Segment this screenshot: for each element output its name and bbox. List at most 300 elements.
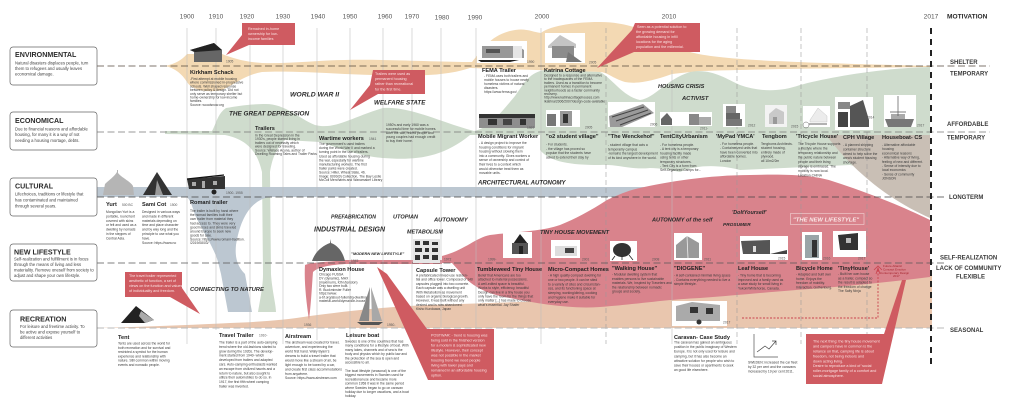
year axis: 1920	[240, 14, 255, 20]
image: houseboat	[884, 95, 916, 127]
entry: Travel Trailer	[219, 333, 277, 388]
entry: Leisure boat: recreational use and became more	[345, 377, 397, 381]
entry: Leisure boat: 1950-	[387, 323, 395, 327]
image: Diogene	[674, 233, 702, 260]
right axis motivation labels: TEMPORARY	[950, 72, 988, 78]
entry: Walking House: materials. We, Inspired by Travelers and	[612, 281, 672, 285]
panel: new lifestyle	[10, 244, 97, 281]
entry: Travel Trailer: utilize their automobiles to do so. In	[219, 376, 272, 380]
entry: Mobile Migrant Worker: - A design project to improve the	[479, 141, 527, 145]
panel: recreation	[10, 310, 97, 347]
entry: Mobile Migrant Worker: their lives to a context which	[479, 162, 521, 166]
entry: FEMA trailer	[477, 41, 535, 94]
panel: cultural: through several years.	[15, 204, 56, 208]
entry: Tent: Tent	[118, 335, 130, 341]
era labels: WORLD WAR II	[290, 92, 339, 98]
entry: Romani trailer: goods for sale.	[190, 234, 212, 238]
era labels: AUTONOMY of the self	[651, 218, 714, 224]
panel: cultural: has contaminated and maintained	[15, 198, 79, 202]
entry: Tengbom: entirely made of	[761, 150, 785, 154]
entry: Tengbom: plywood.	[761, 155, 774, 159]
era labels: HOUSING CRISIS	[658, 84, 705, 90]
entry: Leaf House	[738, 236, 788, 290]
entry: TentCityUrbanism: - Tent City is a form from	[660, 164, 697, 168]
entry: MyPad YMCA: - Containerized units that	[720, 146, 757, 150]
entry: Trailers: Trailers	[255, 126, 275, 132]
text: 1950s mobile homes: to buy their home.	[386, 139, 413, 143]
entry: Houseboat - CS: housing	[882, 147, 894, 151]
entry: Walking House: groups and society.	[612, 290, 641, 294]
entry: CPH Village: - A planned shipping	[843, 143, 873, 147]
band: self-realization (red)	[442, 175, 930, 307]
entry: Sami Cot: Sami Cot	[142, 202, 166, 208]
entry: Micro-Compact Homes: sleeping, working/dining, cooking	[548, 291, 597, 295]
entry: The Wenckehof: - student village that acts a	[608, 143, 648, 147]
era labels: TINY HOUSE MOVEMENT	[540, 230, 610, 236]
entry: Yurt: covered with skins	[106, 219, 134, 223]
entry: Houseboat - CS: economical reasons	[882, 151, 912, 155]
year axis	[180, 14, 939, 22]
panel: environmental	[10, 47, 97, 85]
image: bicycle home	[802, 232, 822, 260]
entry: Capsule Tower: However, it was built without any	[416, 299, 465, 303]
image: walking house	[610, 241, 637, 261]
right axis motivation labels: SELF-REALIZATION	[940, 256, 997, 262]
entry: Bicycle Home	[796, 232, 833, 289]
image: Wenckehof	[608, 102, 655, 127]
entry: Leisure boat: many lakes, channels and of sea is the	[345, 348, 403, 352]
era labels	[190, 84, 767, 293]
entry: Tent: Tents are used across the world for	[118, 342, 171, 346]
right axis motivation labels: LONGTERM	[949, 195, 983, 201]
entry: Sami Cot: Source: https://www.no	[142, 241, 176, 245]
entry: Tricycle House: mobility is now local.	[798, 169, 829, 173]
entry: CPH Village	[835, 97, 878, 165]
entry: Mobile Migrant Worker: housing conditions for migrant	[479, 145, 524, 149]
year axis: 2010	[662, 14, 677, 20]
entry: Leisure boat: many conditions for a lifestyle of boat. With	[345, 344, 409, 348]
entry: Sami Cot: and by way long and the	[142, 228, 178, 232]
entry: Micro-Compact Homes: to a variety of sites and circumstan-	[548, 282, 601, 286]
entry: Leisure boat: the protection of the sea is open and	[345, 356, 399, 360]
entry: Capsule Tower: With Metabolism as movement	[416, 290, 462, 294]
entry: Wartime workers: trailer parks were created.	[319, 167, 358, 171]
callout: tiny house movement and caravans: down acting living.	[813, 360, 843, 364]
entry: Caravan case study	[672, 301, 737, 372]
entry: Katrina Cottage	[544, 33, 605, 103]
entry: The Wenckehof: "The Wenckehof"	[608, 134, 655, 140]
callout: postwar: housing trend we need people	[431, 358, 480, 362]
entry: Wartime workers: 1941	[369, 137, 377, 141]
entry: Travel Trailer: Travel Trailer	[219, 333, 254, 339]
era labels: THE GREAT DEPRESSION	[229, 110, 310, 118]
entry: Capsule Tower: Kisho Kurokawa, Japan	[416, 307, 451, 311]
entry: Yurt: Mongolian Yurt is a	[106, 210, 135, 214]
right axis motivation labels	[936, 60, 1001, 334]
entry: TentCityUrbanism: using tents or other	[660, 156, 690, 160]
entry: Kirkham Schack: between policy & design. Did not	[190, 88, 239, 92]
entry: o2 student village: - For students.	[546, 142, 568, 146]
line chart: Sweden car fleet and caravans: increased by 19 per cent 2011.	[748, 370, 794, 374]
entry: Kirkham Schack: -First attempt at mobile housing	[190, 77, 237, 81]
band: modern new lifestyle arc (red)	[305, 260, 442, 320]
entry: FEMA trailer: mobile houses to house newly	[484, 78, 529, 82]
entry: MyPad YMCA: have been converted into	[720, 150, 758, 154]
entry: The Wenckehof: of its kind anywhere in the world.	[608, 156, 657, 160]
era labels: PREFABRICATION	[331, 214, 376, 220]
entry: TentCityUrbanism: - A tent city is a temporary	[660, 147, 699, 151]
entry: concept emotion: Contemporary Design	[880, 271, 910, 275]
entry: MyPad YMCA: - For homeless people.	[720, 142, 754, 146]
year axis: 2017	[924, 14, 939, 20]
entry: Romani trailer: The trailer is built by hand where	[190, 209, 238, 213]
era labels: PROSUMER	[723, 222, 751, 228]
entry: Leisure boat: where Swedes began to go on caravan	[345, 386, 403, 390]
callout: tiny house movement and caravans	[806, 280, 906, 384]
entry: The Wenckehof: -remains the largest development	[608, 152, 658, 156]
callout: travel trailer aesthetic: views on the function and values	[129, 284, 182, 288]
entry: Houseboat - CS: 2017	[917, 124, 925, 128]
entry: Tumbleweed Tiny House: A well-edited space is beautiful.	[478, 282, 525, 286]
entry: Dymaxion House: Only two were built.	[319, 284, 348, 288]
entry: Trailers: were designed for traveling.	[255, 145, 296, 149]
line chart: Sweden car fleet and caravans: by 32 per cent and the caravans	[748, 365, 796, 369]
image: o2 village	[546, 110, 580, 127]
entry: CPH Village: container structure	[843, 147, 871, 151]
callout: aging population	[597, 23, 700, 68]
entry: Tengbom	[761, 105, 793, 163]
era labels: UTOPIAN	[393, 214, 419, 220]
entry: Capsule Tower	[413, 239, 473, 311]
year axis: 1970	[405, 14, 420, 20]
entry: Mobile Migrant Worker: into a community. Gives workers a	[479, 154, 530, 158]
entry: Diogene	[674, 233, 731, 286]
entry: Trailers	[255, 126, 317, 156]
panel: environmental: them to refugees and usually leaves	[15, 66, 82, 71]
entry: Leisure boat: Swedes is one of the countries that has	[345, 340, 404, 344]
entry: Tengbom: Tengboms Architects.	[761, 142, 793, 146]
entry: Walking House: "Walking House"	[612, 266, 658, 272]
entry: Wartime workers: during the World War II and marked a	[319, 146, 375, 150]
callout: travel trailer aesthetic: aesthetic of function, a set of	[129, 279, 177, 283]
entry: Tumbleweed Tiny House: Tumbleweed Tiny House	[477, 267, 542, 273]
entry: Romani trailer	[187, 175, 245, 245]
entry: Travel Trailer: 1917, the first fifth wheel camping	[219, 380, 269, 384]
entry: Micro-Compact Homes	[548, 240, 609, 304]
entry: Katrina Cottage: permanent homes in permanent	[544, 85, 591, 89]
entry: o2 student village: - the village has proved so	[546, 147, 585, 151]
horizontal motivation lines	[97, 66, 990, 328]
callout: aging population: the growing demand for	[636, 30, 676, 34]
band: temporary to longterm (taupe)	[826, 135, 930, 218]
band: shelter (orange)	[165, 22, 930, 91]
icon: yurt	[103, 170, 134, 195]
year axis: 1940	[311, 14, 326, 20]
icon: Romani trailer	[187, 175, 225, 194]
panel: economical: needing a housing mortage, debts.	[15, 138, 80, 143]
entry: Leaf House: 2015	[778, 256, 786, 260]
entry: Kirkham Schack	[190, 43, 243, 107]
image: tent city	[660, 112, 712, 126]
era labels: METABOLISM	[407, 230, 443, 236]
panel: new lifestyle: adjust and shape your own lifestyle.	[14, 273, 80, 278]
entry: Dymaxion House: material-world/dymaxion-house	[319, 299, 366, 303]
panel: cultural: CULTURAL	[15, 182, 54, 190]
entry: Trailers: 1930's, people started living in	[255, 137, 300, 141]
2017 end line	[930, 28, 932, 364]
entry: Leisure boat: common 1958 it was in the same period	[345, 382, 404, 386]
image: tricycle house	[803, 106, 830, 128]
entry: Caravan case study: Caravan- Case Study	[674, 335, 731, 341]
entry: Caravan case study: save their houses or apartments to seek	[674, 364, 734, 368]
entry: Caravan case study: Europe. It is not only used for leisure and	[674, 350, 735, 354]
panel: new lifestyle: materiality. Remove oneself from society to	[14, 268, 94, 272]
era labels: "MODERN NEW LIFESTYLE"	[351, 251, 404, 256]
entry: Travel Trailer: trailer was invented.	[219, 384, 249, 388]
image: capsule tower	[413, 239, 440, 263]
entry: Mobile Migrant Worker: would otherwise treat them as	[479, 167, 524, 171]
entry: Capsule Tower: capsules plugged into two concrete.	[416, 282, 469, 286]
entry: Tent: nature. Still common within moving	[118, 359, 170, 363]
band: seasonal (beige)	[97, 272, 932, 328]
entry: Tumbleweed Tiny House: 1999-	[488, 258, 496, 262]
panel: new lifestyle: Self-realization and fulfillment is in focus	[14, 256, 88, 262]
entry: Katrina Cottage: Designed to a response and alternative	[544, 74, 602, 78]
entry: TinyHouse: as a trailer, compact so	[838, 276, 873, 280]
entry: Leaf House: a case study for small living in	[738, 282, 783, 286]
band: longterm (blue-grey)	[97, 187, 740, 312]
icon: shack	[190, 43, 222, 62]
panel: environmental: economical damage.	[15, 72, 54, 76]
entry: TinyHouse: the result is adapted to	[838, 281, 872, 285]
entry: Caravan case study: attractive solution for people who wish to	[674, 359, 734, 363]
entry: Tumbleweed Tiny House: Design can live in a tiny house you	[478, 290, 530, 294]
entry: Sami Cot: principle to use what you	[142, 232, 179, 236]
heading: motivation: MOTIVATION	[947, 14, 988, 20]
entry: Sami Cot	[142, 172, 180, 245]
callout: home ownership	[226, 23, 295, 55]
entry: Travel Trailer: an escape from civilized haunts and a	[219, 367, 275, 371]
year axis: 1900	[180, 14, 195, 20]
entry: Yurt: in the steppes of	[106, 232, 131, 236]
entry: Romani trailer: around Europe to seek new	[190, 230, 231, 234]
entry: Wartime workers: Source: Hiller, Wheat State, 46.	[319, 171, 366, 175]
callout: permanent housing	[350, 70, 425, 110]
entry: Houseboat - CS: - Alternative way of living,	[882, 156, 920, 160]
callout: postwar: remained in an affordable housing	[431, 368, 487, 372]
image: caravan	[672, 301, 727, 326]
entry: Capsule Tower: tial and office tower. Composed of 140	[416, 278, 473, 282]
entry: Walking House: the relationship between nomadic	[612, 285, 662, 289]
callout: tiny house movement and caravans: roller-mortgage family of a comfort and	[813, 369, 876, 373]
entry: Mobile Migrant Worker: housing without slowing them	[479, 150, 523, 154]
entry: The Wenckehof: 2006	[650, 122, 658, 126]
entry: Katrina Cottage: Katrina Cottage	[544, 68, 586, 74]
entry: Yurt: dwelling by nomads	[106, 228, 136, 232]
era labels: ACTIVIST	[681, 96, 709, 102]
entry: Tent: restricted a symbol for the human	[118, 350, 168, 354]
entry: Dymaxion House: R. Buckminster Fuller	[319, 288, 352, 292]
entry: TentCityUrbanism: 2011-	[700, 126, 708, 130]
entry: Dymaxion House: Chicago FUSSA	[319, 272, 344, 276]
panel: environmental: ENVIRONMENTAL	[15, 51, 77, 59]
entry: Tricycle House: Location CHINA	[798, 174, 823, 178]
entry: Wartime workers: manufacturing workers. The first	[319, 162, 367, 166]
right axis motivation labels: LACK OF COMMUNITY	[936, 266, 1001, 272]
entry: Airstream: Airstream	[285, 334, 311, 340]
entry: Romani trailer: Source: https://www.romani-tradition.	[190, 237, 245, 241]
year axis: 1910	[209, 14, 224, 20]
image: plywood student housing	[765, 105, 787, 127]
entry: Dymaxion House: (maximum), ION (tension)	[319, 280, 357, 284]
entry: Trailers: trailers out of necessity which	[255, 141, 299, 145]
callout: permanent housing: Trailers were used as	[375, 72, 410, 76]
entry: Yurt: Yurt	[106, 202, 117, 208]
entry: Leisure boat: Leisure boat	[346, 333, 379, 339]
entry: FEMA trailer: 1990	[527, 60, 535, 64]
callout: aging population: locations for the aging	[636, 40, 672, 44]
callout: tiny house movement and caravans: reliance on that, camping life is about	[813, 350, 874, 354]
callout: postwar: was not possible in the market	[431, 354, 481, 358]
entry: Wartime workers	[319, 136, 383, 182]
entry: Capsule Tower: based on organic biological growth.	[416, 294, 468, 298]
entry: TinyHouse: - Built her own house	[838, 272, 870, 276]
entry: Romani trailer: the nomad families built their	[190, 213, 233, 217]
entry: FEMA trailer: - FEMA uses both trailers and	[484, 74, 528, 78]
entry: Micro-Compact Homes: everyday use.	[548, 300, 569, 304]
entry: Romani trailer: 1900- 1955	[226, 191, 243, 195]
callout: postwar: lifestyle. However, their concept	[431, 348, 483, 352]
entry: Capsule Tower: A prefabricated mixed-use residen-	[416, 274, 468, 278]
entry: o2 student village: asked to extend their stay by	[546, 155, 589, 159]
right axis motivation labels: AFFORDABLE	[947, 122, 988, 128]
entry: Wartime workers: The government's used trailers	[319, 142, 365, 146]
entry: concept emotion: Future Atlantic	[883, 264, 903, 268]
entry: Wartime workers: Used as affordable housing during	[319, 154, 370, 158]
entry: o2 student village	[546, 110, 599, 159]
entry: Romani trailer: Romani trailer	[190, 200, 228, 206]
entry: Micro-Compact Homes: - A high quality compact dwelling for	[548, 274, 602, 278]
callout: permanent housing: for the first time.	[375, 88, 401, 92]
entry: Leisure boat: biggest movements in Sweden used for	[345, 373, 404, 377]
callout: travel trailer aesthetic: of individuality and freedom.	[129, 289, 175, 293]
entry: Capsule Tower: Each capsule was a dwelling unit	[416, 286, 465, 290]
icon: sailboat	[357, 287, 383, 325]
entry: Capsule Tower: 1972	[444, 258, 452, 262]
image: shipping container village	[835, 97, 873, 130]
entry: CPH Village: CPH Village	[843, 135, 874, 141]
entry: Leaf House: improved and a family used as	[738, 278, 784, 282]
label box: the new lifestyle	[790, 214, 864, 224]
image: cottage	[545, 33, 585, 63]
entry: Kirkham Schack: only serve as temporary shelter but	[190, 92, 242, 96]
callout: aging population: population and the millennial.	[636, 45, 684, 49]
entry: Diogene: 2011	[704, 258, 711, 262]
entry: Leaf House: Yukon/Whitehorse, Canada.	[738, 286, 780, 290]
callout: aging population: affordable housing in infill	[636, 35, 678, 39]
entry: Tumbleweed Tiny House: Belief that Americans are too	[478, 274, 521, 278]
entry: Walking House: 2008	[652, 258, 660, 262]
entry: Yurt: 500 BC	[122, 203, 134, 207]
entry: TinyHouse: 'TinyHouse'	[838, 266, 870, 272]
callout: home ownership: income families	[248, 37, 274, 41]
callout: tiny house movement and caravans: social atmosphere.	[813, 374, 844, 378]
icon: Sami cot	[143, 172, 172, 195]
entry: Tengbom: student housing,	[761, 146, 786, 150]
entry: Houseboat - CS: local economics	[882, 168, 906, 172]
entry: Sami Cot: have.	[142, 236, 150, 240]
right axis motivation labels: SHELTER	[950, 60, 978, 66]
entry: Tent: events and nomadic people.	[118, 363, 160, 367]
entry: Tricycle House: temporary relationship and	[798, 151, 838, 155]
entry: Sami Cot: 1500	[170, 203, 178, 207]
entry: o2 student village: 2005	[585, 126, 593, 130]
entry: Leaf House: - Tiny home that is becoming	[738, 274, 781, 278]
entry: Romani trailer: /2019/08/03/	[190, 241, 209, 245]
entry: Dymaxion House: 1945	[351, 259, 359, 263]
entry: Dymaxion House: https://www.	[319, 292, 337, 296]
entry: Mobile Migrant Worker: 1997	[527, 126, 535, 130]
entry: Houseboat - CS	[882, 95, 925, 181]
entry: Tricycle House: The Tricycle House supports	[798, 142, 841, 146]
entry: FEMA trailer: https://www.fema.gov/	[484, 90, 517, 94]
band: affordable (green)	[165, 67, 930, 312]
callout: permanent housing: rather than recreational	[375, 82, 413, 86]
entry: Micro-Compact Homes: ces, and its functioning space at	[548, 287, 596, 291]
year axis: 1990	[468, 14, 483, 22]
image: migrant housing	[479, 114, 535, 128]
entry: Micro-Compact Homes: and hygiene make it suitable for	[548, 296, 596, 300]
entry: CPH Village: area's student housing	[843, 156, 877, 160]
icon: tent	[121, 306, 154, 323]
entry: Kirkham Schack: home-ownership for low-income	[190, 96, 238, 100]
callout: postwar: living with lower pays and	[431, 364, 473, 368]
entry: Caravan case study: position in the public imaginary of Western	[674, 345, 737, 349]
entry: Dymaxion House: Dymaxion House	[319, 267, 364, 273]
image: micro-compact home	[551, 240, 580, 258]
entry: CPH Village: aimed to help solve the	[843, 152, 878, 156]
year axis: 1960	[378, 14, 393, 20]
entry: Trailers: Dwelling Roaming Tales and Trailer Parks	[255, 152, 317, 156]
entry: Katrina Cottage: recovery.	[544, 92, 558, 96]
entry: Mobile Migrant Worker: sense of ownership and control of	[479, 158, 529, 162]
entry: Tumbleweed Tiny House: what's essential. Jay Shafer	[478, 303, 520, 307]
callout: home ownership: ownership for low-	[248, 32, 279, 36]
entry: Wartime workers: Image: 6000(0) Collection, The Bay Leslie	[319, 174, 381, 178]
entry: Mobile Migrant Worker: Mobile Migrant Worker	[478, 134, 539, 140]
line chart: Sweden car fleet and caravans	[748, 334, 798, 374]
entry: Tumbleweed Tiny House: attached to material possessions.	[478, 278, 528, 282]
entry: CPH Village: shortage.	[843, 161, 857, 165]
entry: Leisure boat: holiday due to longer vacations, and a boat	[345, 390, 409, 394]
entry: The Wenckehof	[608, 102, 658, 160]
entry: Leisure boat	[345, 287, 409, 398]
panel: recreation: RECREATION	[20, 316, 66, 324]
year axis: 2000	[535, 14, 550, 20]
entry: Bicycle Home: Interaction. Gothenburg.	[796, 285, 832, 289]
entry: Dymaxion House: a-bf.org/about-fuller/dig-dwelling	[319, 295, 367, 299]
entry: Bicycle Home: 2016	[823, 256, 831, 260]
right axis motivation labels: SEASONAL	[950, 328, 984, 334]
panel: environmental: Natural disasters displaces people, turn	[15, 60, 89, 66]
year axis: 1980	[435, 14, 450, 22]
entry: TentCityUrbanism: Self-Organized Camps for...	[660, 168, 701, 172]
entry: Caravan case study: camping, but it has also become an	[674, 354, 727, 358]
entry: Tricycle House: 2015	[791, 124, 799, 128]
entry: Katrina Cottage: trailers. Used as a transition to become	[544, 81, 602, 85]
entry: TentCityUrbanism	[660, 112, 712, 172]
entry: Tumbleweed Tiny House: Works to style, efficiency, beautiful	[478, 286, 529, 290]
